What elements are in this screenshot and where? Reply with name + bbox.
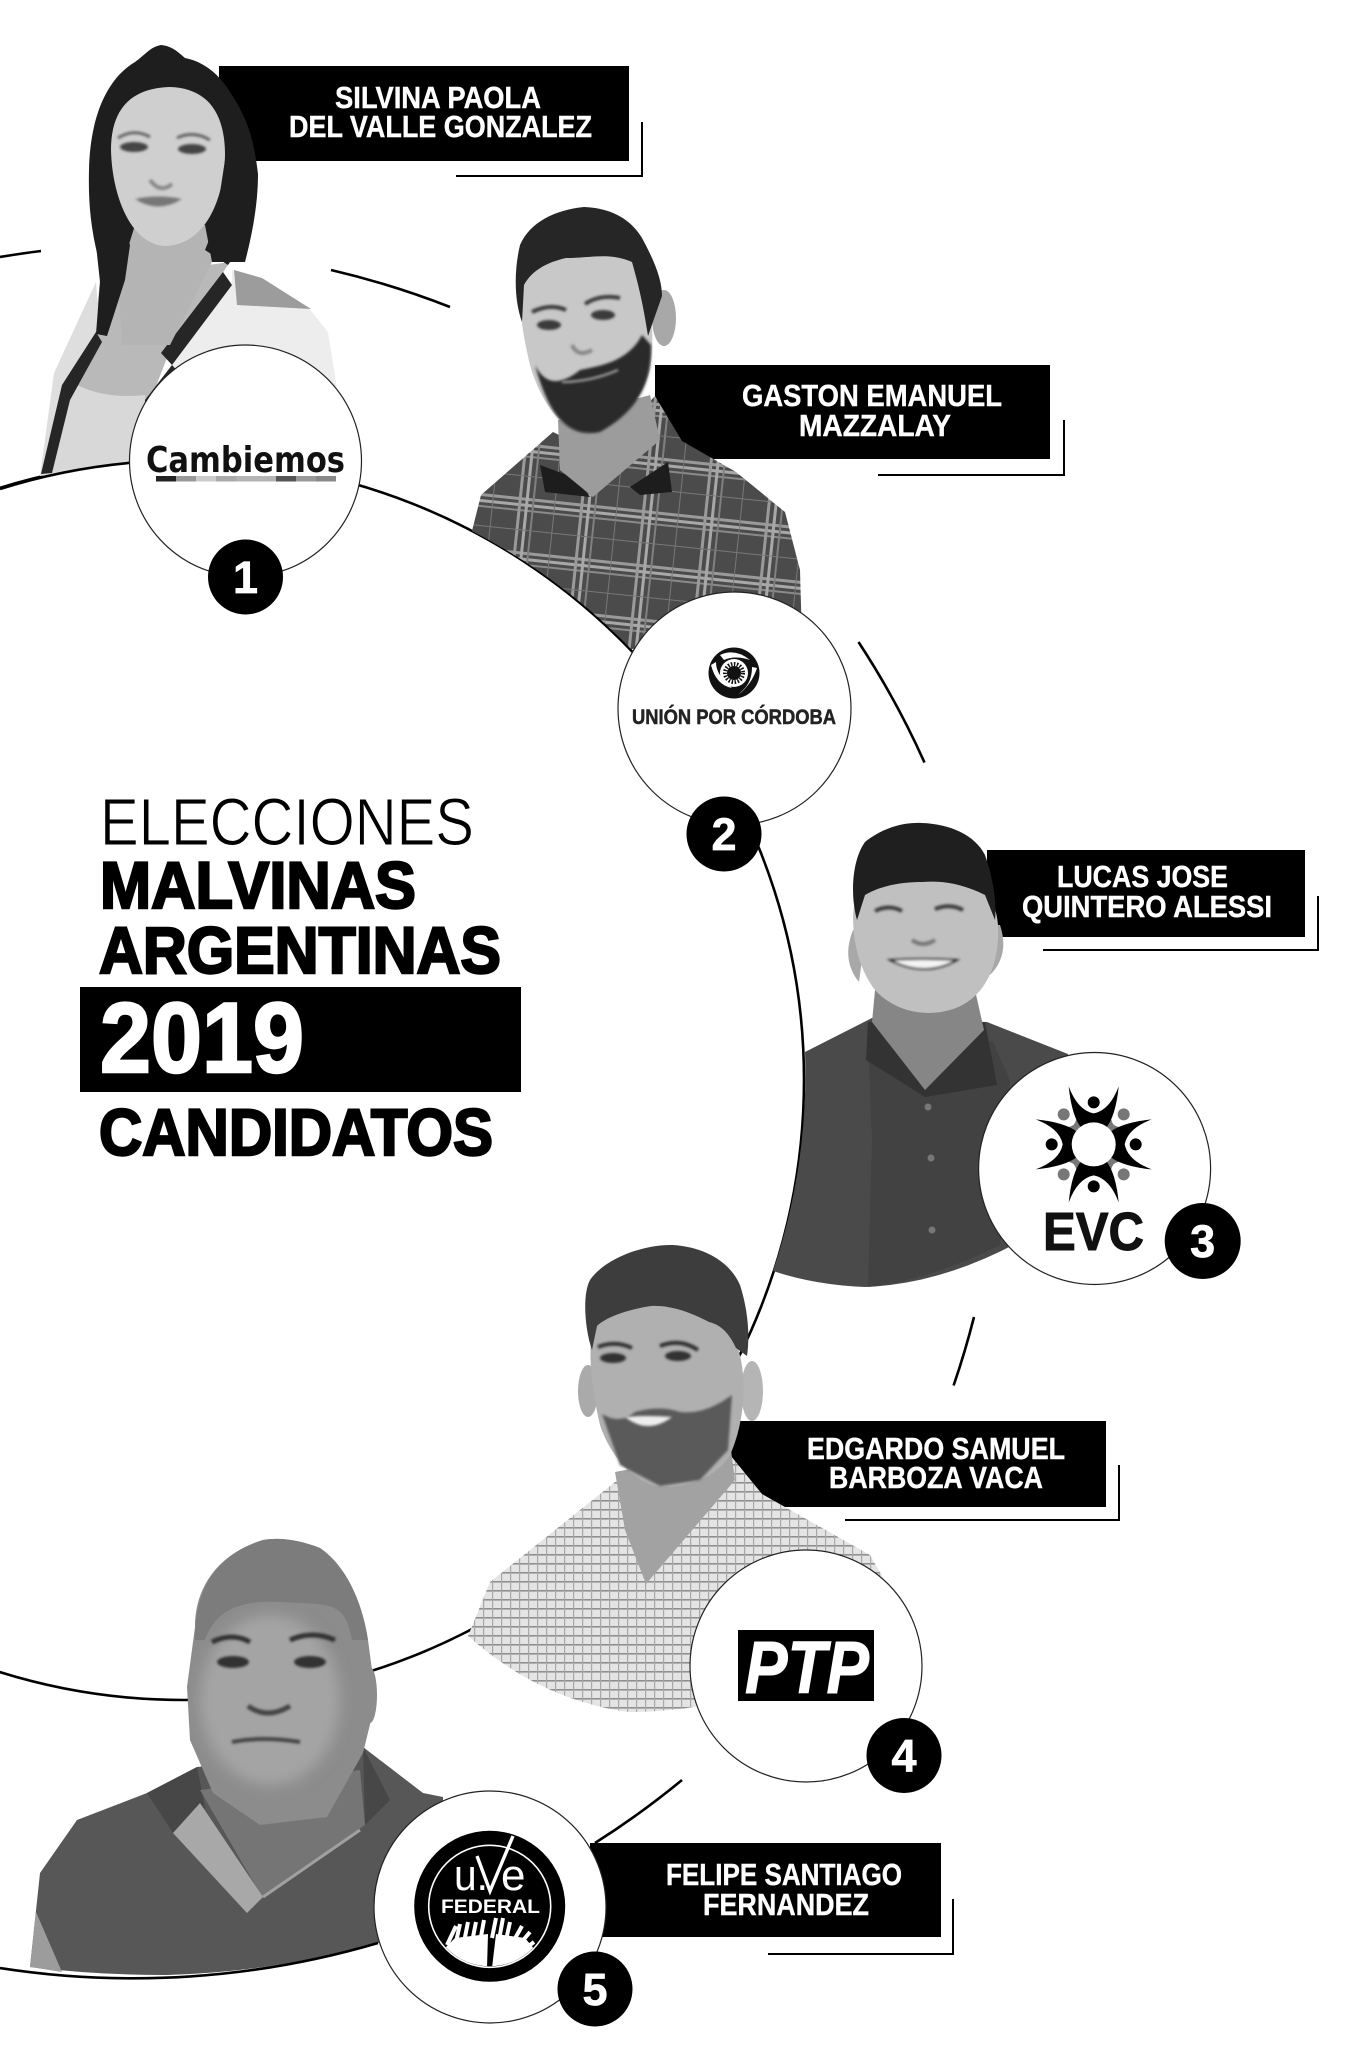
badge 3 [1165,1203,1241,1279]
face [853,872,998,1013]
name label 1: DEL VALLE GONZALEZ [289,110,592,144]
name label 5 [590,1843,953,1954]
jacket left [40,282,100,476]
inner timeline circle [0,460,804,1700]
collar shade [147,1747,390,1833]
year banner [80,987,521,1092]
portrait 3: Lucas Quintero [773,823,1068,1287]
outer timeline arcs [0,251,974,1843]
title: elecciones: ELECCIONES [100,785,474,860]
badge 2 [686,796,762,872]
logo box [738,1630,874,1701]
hair [585,1245,748,1356]
name label 5: FERNANDEZ [703,1888,869,1922]
ear [652,290,676,346]
logo disc [414,1831,565,1982]
neck [872,990,984,1090]
hair back [89,45,258,282]
logo wordmark: u. [454,1851,488,1900]
facial features [212,1635,335,1742]
hair [516,207,662,336]
facial features [118,133,210,206]
logo federal text: FEDERAL [441,1897,540,1918]
emblem [1036,1086,1152,1202]
portrait 2: Gaston Mazzalay [472,207,802,649]
badge 3: 3 [1190,1216,1215,1267]
logo text: UNIÓN POR CÓRDOBA [632,705,836,729]
hair [853,823,995,920]
badge 4: 4 [891,1730,917,1782]
name label 4: EDGARDO SAMUEL [807,1432,1065,1466]
jacket [773,1018,1068,1287]
party circle 1: Cambiemos [130,345,362,577]
front hair strands [89,160,258,336]
shirt buttons [924,1104,936,1234]
title: argentinas: ARGENTINAS [99,913,501,987]
ears [363,1667,377,1723]
face [590,1301,744,1487]
name label 5: FELIPE SANTIAGO [666,1858,902,1892]
logo text: EVC [1043,1202,1144,1262]
beard [535,335,651,433]
name label 4 [731,1421,1119,1520]
neck [200,1770,365,1897]
top [46,380,152,476]
name label 2: MAZZALAY [799,409,951,443]
facial features [532,297,620,382]
checked shirt [468,1456,890,1712]
title: candidatos: CANDIDATOS [99,1095,493,1169]
title block [80,785,521,1169]
badge 1 [208,540,283,614]
chest [68,262,230,402]
facial features [875,906,963,969]
party circle 5: uVe Federal [374,1791,606,2023]
face highlights [200,1615,340,1785]
portrait 5: Felipe Fernandez [30,1539,445,1975]
name label 2 [655,365,1064,475]
collar [866,1022,997,1097]
lapels [41,272,232,474]
facial features [598,1343,698,1426]
collar shadows [540,462,672,497]
year: 2019 [100,982,304,1093]
jacket right [150,270,340,470]
name label 2: GASTON EMANUEL [742,379,1002,413]
sleeve [30,1912,62,1972]
name label 3: QUINTERO ALESSI [1022,890,1272,924]
logo colour bar [156,476,336,482]
emblem [708,648,760,698]
badge 5: 5 [582,1964,608,2015]
badge 1: 1 [233,552,258,603]
beard [602,1395,732,1486]
hair shade [195,1539,368,1640]
party circle 3: EVC [979,1052,1211,1284]
badge 4 [866,1718,942,1793]
title: malvinas: MALVINAS [100,848,416,922]
neck [615,1450,735,1584]
badge 2: 2 [711,809,737,860]
face [111,87,225,246]
face and hair [187,1539,376,1825]
name label 3: LUCAS JOSE [1057,860,1228,894]
logo wordmark [454,1836,525,1900]
logo hands [445,1918,535,1968]
logo text: Cambiemos [146,440,345,481]
name label 1 [219,66,642,176]
collar [173,1803,263,1913]
shirt [868,1040,1010,1287]
portrait 1: Silvina Gonzalez [40,45,340,476]
ears [848,925,1003,982]
logo wordmark: e [501,1851,525,1900]
logo ring [429,1845,551,1967]
portrait 4: Edgardo Barboza [468,1245,890,1712]
ears [578,1365,598,1417]
polo shirt [30,1747,445,1975]
party circle 4: PTP [690,1550,922,1782]
logo text: PTP [745,1626,870,1709]
name label 1: SILVINA PAOLA [335,81,541,115]
face [521,244,652,432]
name label 4: BARBOZA VACA [829,1461,1043,1495]
shoulder sequins [234,270,311,309]
neck [118,225,212,345]
plaid shirt [472,396,802,649]
name label 3 [987,850,1318,950]
party circle 2: Union por Cordoba [618,592,851,825]
timeline overlays under portraits [0,462,378,1978]
neck [558,395,660,497]
collar edge [263,1830,360,1897]
badge 5 [558,1952,632,2026]
